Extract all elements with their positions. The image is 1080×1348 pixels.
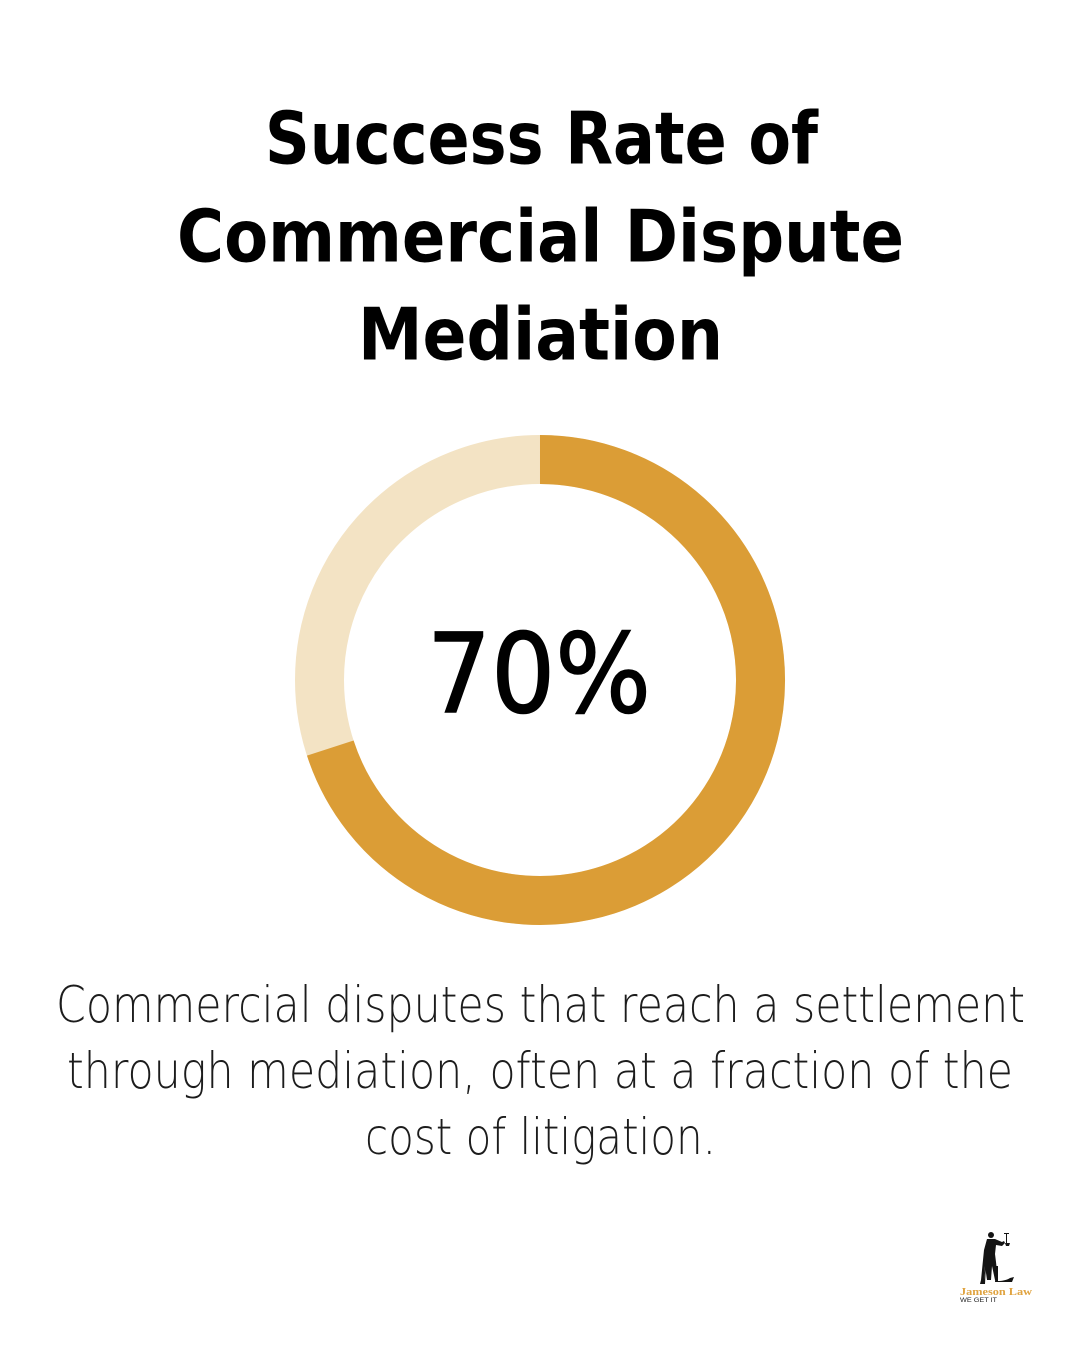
logo tagline: WE GET IT	[960, 1297, 997, 1304]
description text	[56, 976, 1025, 1166]
title: Commercial Dispute	[177, 194, 904, 278]
percentage value: 70%	[427, 610, 651, 738]
donut track	[320, 460, 760, 900]
title	[177, 96, 904, 376]
icon: lady justice	[980, 1232, 1014, 1284]
description text: cost of litigation.	[365, 1108, 716, 1166]
donut value arc	[330, 460, 761, 900]
donut chart: 70%	[320, 460, 761, 900]
title: Success Rate of	[265, 96, 819, 180]
title: Mediation	[358, 292, 723, 376]
logo: Jameson Law	[960, 1232, 1032, 1304]
logo name: Jameson Law	[960, 1287, 1032, 1298]
